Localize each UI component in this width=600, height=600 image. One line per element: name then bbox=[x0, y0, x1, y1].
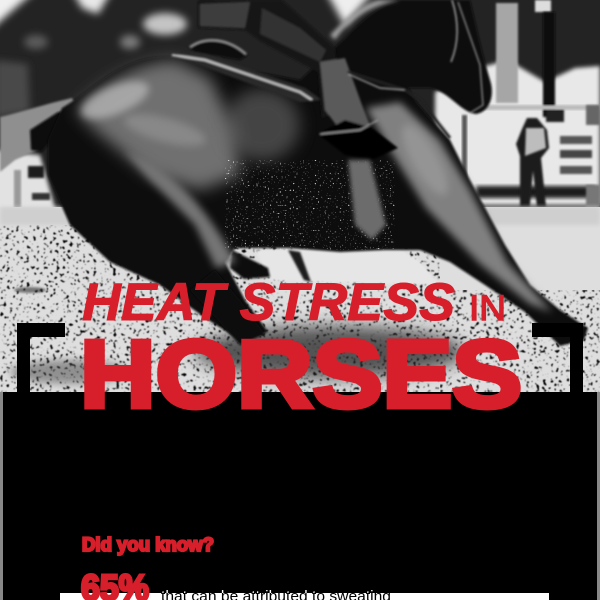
did you know heading: Did you know? bbox=[82, 535, 214, 556]
horse: tail bbox=[0, 98, 80, 172]
horse: muscle highlights bbox=[76, 0, 552, 345]
arena ground bbox=[0, 207, 600, 392]
title line: heat stress in: HEAT STRESS bbox=[82, 273, 455, 332]
horse: flying dirt spray bbox=[225, 160, 395, 250]
background: arena fence, trailers and spectator bbox=[0, 0, 600, 225]
saddle and blanket bbox=[172, 39, 322, 102]
black panel with bracket tabs bbox=[3, 323, 597, 600]
pale patches of dirt behind the legs bbox=[256, 248, 438, 286]
horse: far legs bbox=[230, 250, 311, 282]
title line: horses: HORSES bbox=[80, 321, 522, 428]
title bbox=[80, 273, 522, 428]
white text band at page cut-off bbox=[60, 593, 549, 600]
stirrup leather and cinch strap bbox=[348, 72, 450, 240]
rider: jeans and boot bbox=[198, 0, 398, 160]
background: trees and sky bbox=[0, 0, 600, 215]
photo: barrel racing horse bbox=[0, 0, 600, 392]
title line: heat stress in: IN bbox=[469, 289, 506, 328]
horse: bridle bbox=[451, 0, 483, 113]
horse: body, neck and head bbox=[48, 0, 588, 346]
